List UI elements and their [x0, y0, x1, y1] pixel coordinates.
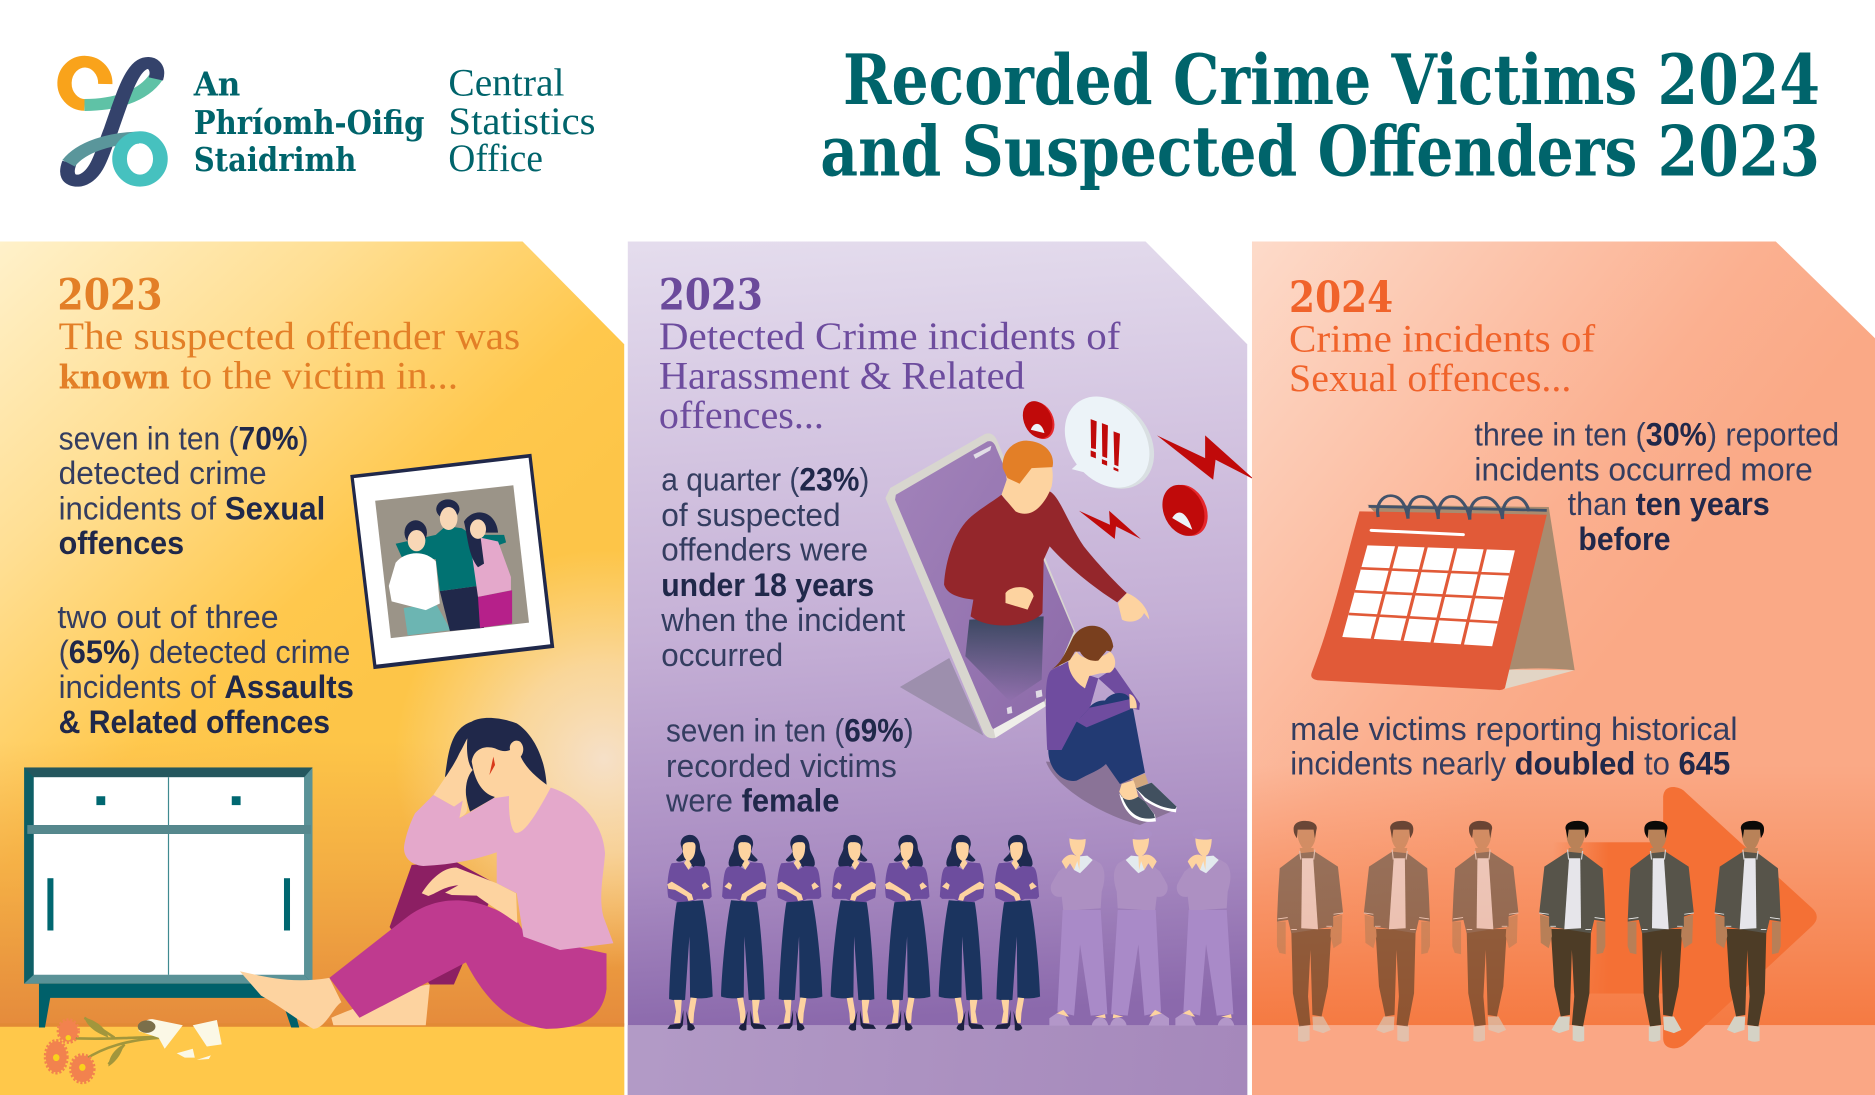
- illustration: distressed woman sitting: [240, 718, 613, 1029]
- illustration: seated girl with head down: [1046, 626, 1177, 825]
- heading: panel 3 year: 2024: [1289, 273, 1393, 323]
- text: male victims doubled to 645: incidents nearly doubled to 645: [1290, 746, 1730, 782]
- icon: red lightning bolts and alarm discs: [1018, 398, 1255, 540]
- panel: sexual offences, 2024: [1252, 241, 1875, 1095]
- heading: panel 3 subtitle: [1289, 316, 1596, 400]
- text: three in ten 30%: incidents occurred more: [1474, 452, 1813, 488]
- heading: panel 2 subtitle: Detected Crime incidents of: [659, 314, 1121, 358]
- logo text: English name: [448, 61, 596, 180]
- pictogram: three faded male victims: [1049, 829, 1234, 1026]
- title: [820, 40, 1820, 193]
- heading: panel 1 subtitle: The suspected offender was: [59, 314, 520, 358]
- illustration: desk calendar: [1311, 496, 1575, 690]
- heading: panel 2 subtitle: [659, 314, 1121, 437]
- heading: panel 1 subtitle: to the victim in...: [181, 354, 458, 398]
- heading: panel 2 year: 2023: [659, 271, 763, 321]
- text: seven in ten 70%: seven in ten (70%): [59, 420, 309, 456]
- text: two out of three 65%: incidents of Assaults: [59, 669, 354, 705]
- heading: panel 3 subtitle: Sexual offences...: [1289, 356, 1571, 400]
- text: a quarter 23%: occurred: [661, 637, 783, 673]
- text: seven in ten 69%: were female: [665, 783, 839, 819]
- pictogram: three earlier men (faded): [1277, 821, 1518, 1042]
- heading: panel 1 year: 2023: [57, 271, 163, 321]
- text: seven in ten 70%: offences: [59, 525, 184, 561]
- text: two out of three 65%: (65%) detected crime: [59, 634, 350, 670]
- logo text: Irish name: [193, 66, 425, 179]
- text: two out of three 65%: & Related offences: [59, 704, 330, 740]
- illustration: fallen flowers and broken vase: [46, 1018, 222, 1082]
- pictogram: seven women of ten victims: [667, 835, 1040, 1031]
- illustration: cabinet: [24, 767, 312, 1028]
- text: seven in ten 70%: incidents of Sexual: [59, 490, 325, 526]
- text: three in ten 30%: than ten years: [1568, 486, 1770, 522]
- logo text: English name: Central: [448, 61, 564, 105]
- heading: panel 2 subtitle: Harassment & Related: [659, 354, 1025, 398]
- text: three in ten 30%: [1474, 416, 1839, 557]
- text: a quarter 23%: when the incident: [660, 602, 905, 638]
- text: seven in ten 69%: recorded victims: [666, 748, 897, 784]
- heading: panel 3 subtitle: Crime incidents of: [1289, 316, 1596, 360]
- text: seven in ten 70%: [59, 420, 325, 561]
- logo: Central Statistics Office: [64, 61, 596, 181]
- pictogram: six men showing doubling: [1277, 821, 1781, 1042]
- heading: panel 2 subtitle: offences...: [659, 393, 824, 437]
- text: a quarter 23%: [660, 462, 905, 673]
- icon: CSO knot mark: [64, 62, 160, 181]
- illustration: man emerging from phone: [885, 433, 1149, 738]
- text: a quarter 23%: under 18 years: [661, 567, 874, 603]
- panel: known to the victim, 2023: [0, 241, 624, 1095]
- text: male victims doubled to 645: male victims reporting historical: [1290, 711, 1737, 747]
- text: seven in ten 70%: detected crime: [59, 455, 267, 491]
- logo text: Irish name: Phríomh-Oifig: [194, 104, 425, 142]
- heading: panel 1 subtitle: known: [59, 359, 170, 397]
- arrow: increase: [1553, 787, 1817, 1048]
- logo text: English name: Statistics: [448, 99, 596, 143]
- text: three in ten 30%: before: [1578, 521, 1671, 557]
- text: male victims doubled to 645: [1290, 711, 1737, 782]
- text: a quarter 23%: offenders were: [661, 532, 868, 568]
- icon: speech bubble with exclamation marks: [1049, 386, 1170, 499]
- text: a quarter 23%: of suspected: [661, 497, 841, 533]
- text: three in ten 30%: three in ten (30%) reported: [1474, 416, 1839, 452]
- text: seven in ten 69%: [665, 713, 914, 819]
- text: two out of three 65%: two out of three: [57, 599, 279, 635]
- heading: panel 1 subtitle: [59, 314, 520, 398]
- text: a quarter 23%: a quarter (23%): [661, 462, 869, 498]
- panel: harassment offences, 2023: [628, 241, 1255, 1095]
- text: two out of three 65%: [57, 599, 354, 740]
- pictogram: three additional men: [1539, 821, 1781, 1042]
- logo text: Irish name: Staidrimh: [194, 141, 356, 179]
- illustration: framed family photo: [350, 454, 554, 669]
- text: seven in ten 69%: seven in ten (69%): [666, 713, 914, 749]
- logo text: Irish name: An: [193, 66, 240, 104]
- logo text: English name: Office: [448, 136, 543, 180]
